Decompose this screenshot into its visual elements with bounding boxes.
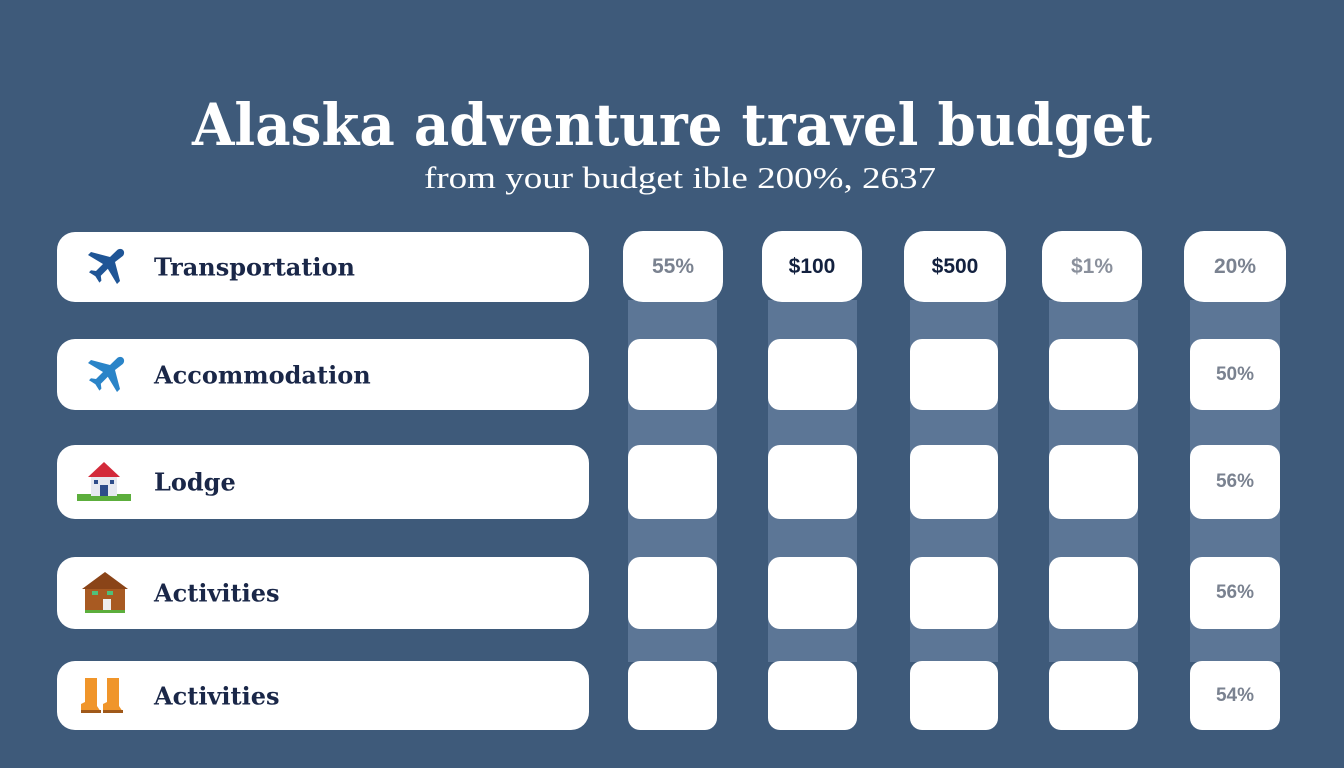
row: Activities cabin: Activities [154,578,279,608]
row: Transportation [57,232,589,302]
row: Lodge: Lodge [154,468,236,496]
header values: 55% [652,254,694,278]
header values: $100 [789,254,835,278]
row: Activities boots: Activities [154,681,279,710]
header values: 20% [1214,254,1256,278]
header values: $500 [932,254,978,278]
row: Activities cabin [57,557,589,629]
row: Accommodation: Accommodation [154,360,371,389]
header values: $1% [1071,254,1113,278]
header values [623,231,1286,302]
table cells: 56% [1216,471,1254,492]
icon: house [77,462,131,501]
table cells [628,339,1280,730]
icon: cabin [82,572,128,613]
table cells: 50% [1216,364,1254,384]
row: Lodge [57,445,589,519]
table cells: 54% [1216,684,1254,706]
title: Alaska adventure travel budget [191,91,1152,159]
icon: plane dark [88,248,124,284]
table cells: 56% [1216,582,1254,603]
icon: boots [81,678,123,713]
icon: plane light [88,356,124,392]
row: Transportation: Transportation [154,252,355,282]
subtitle: from your budget ible 200%, 2637 [424,160,936,195]
row: Activities boots [57,661,589,730]
row: Accommodation [57,339,589,410]
